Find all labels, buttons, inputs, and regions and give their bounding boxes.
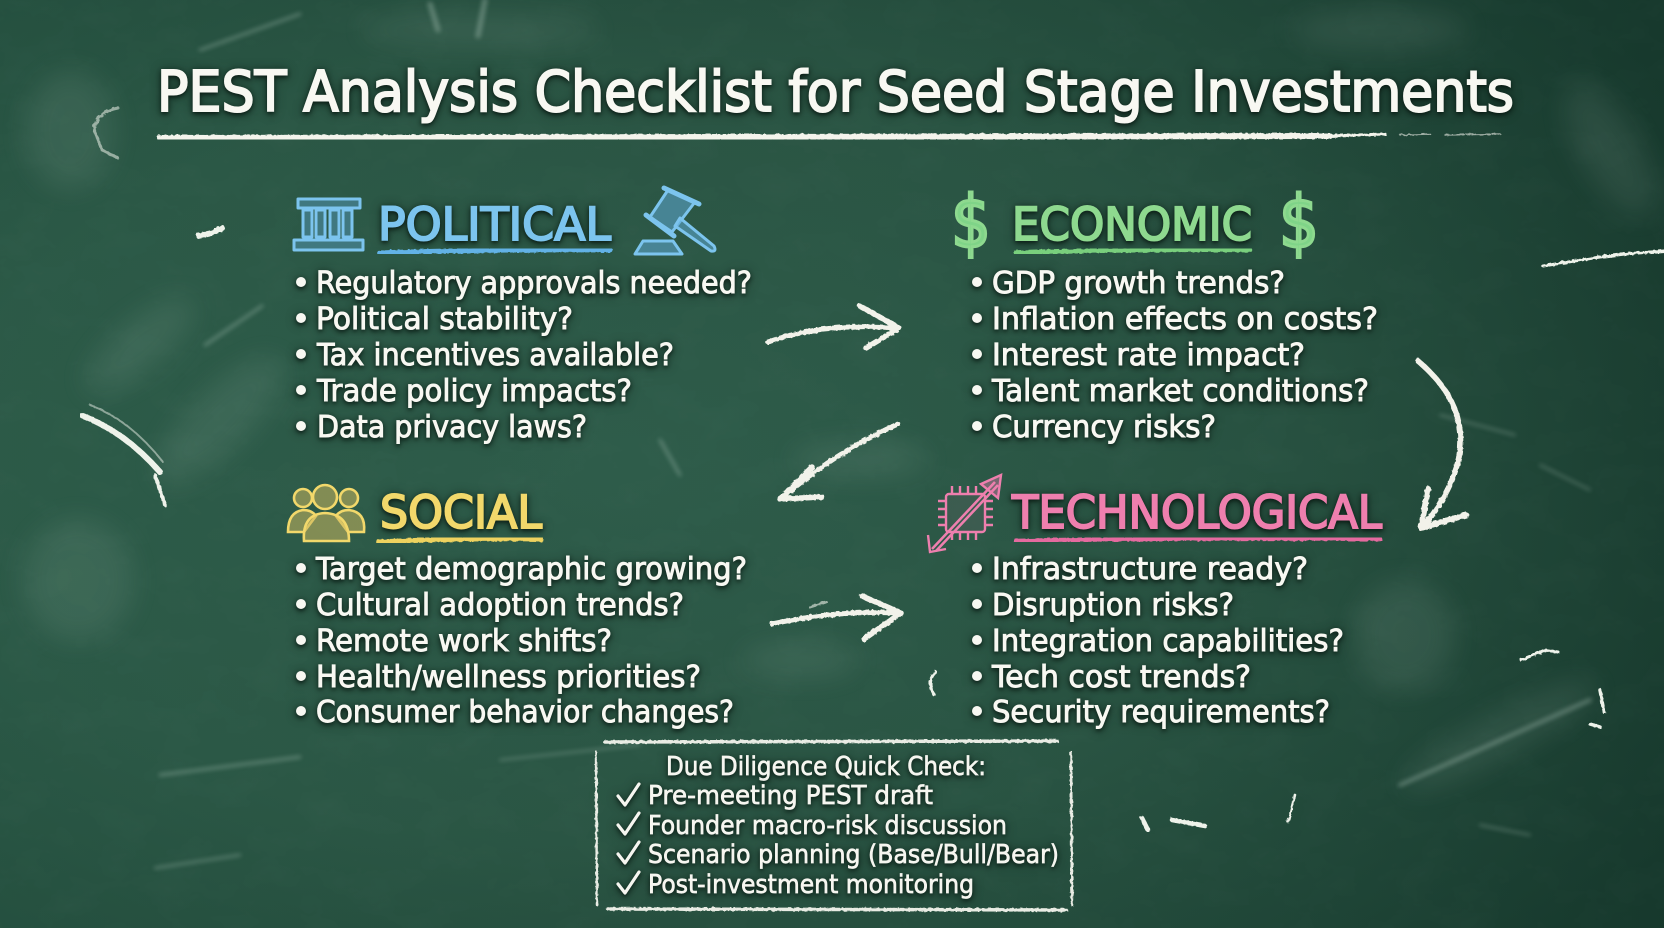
box frame <box>596 741 1072 910</box>
panel: political <box>294 188 752 445</box>
icon: group of people <box>288 485 364 541</box>
technological checklist: Infrastructure ready? <box>992 552 1308 587</box>
political checklist <box>296 266 752 445</box>
political checklist: Regulatory approvals needed? <box>316 266 752 301</box>
arrow: economic to technological <box>1418 361 1466 528</box>
social checklist: Consumer behavior changes? <box>316 695 734 730</box>
heading underline: political <box>380 250 610 253</box>
economic checklist: Currency risks? <box>992 410 1216 445</box>
technological checklist <box>972 552 1344 730</box>
box heading: Due Diligence Quick Check: <box>666 752 986 782</box>
social checklist <box>296 552 747 730</box>
technological checklist: Integration capabilities? <box>992 624 1344 659</box>
economic checklist: GDP growth trends? <box>992 266 1285 301</box>
economic checklist: Talent market conditions? <box>991 374 1369 409</box>
icon: government building <box>294 199 363 250</box>
check items: Post-investment monitoring <box>648 870 974 900</box>
check items: Scenario planning (Base/Bull/Bear) <box>648 840 1059 870</box>
economic checklist: Inflation effects on costs? <box>992 302 1378 337</box>
panel: social <box>288 485 747 730</box>
icon: dollar sign left: $ <box>951 180 991 264</box>
icon: gavel <box>635 188 715 254</box>
economic checklist <box>972 266 1378 445</box>
check items: Founder macro-risk discussion <box>648 811 1007 841</box>
arrow: economic to social <box>780 424 898 499</box>
technological checklist: Disruption risks? <box>992 588 1234 623</box>
heading: political: POLITICAL <box>378 198 611 251</box>
social checklist: Remote work shifts? <box>316 624 612 659</box>
heading underline: technological <box>1015 538 1380 541</box>
technological checklist: Security requirements? <box>992 695 1330 730</box>
social checklist: Target demographic growing? <box>315 552 747 587</box>
political checklist: Data privacy laws? <box>317 410 587 445</box>
panel: economic <box>951 180 1378 445</box>
political checklist: Trade policy impacts? <box>316 374 632 409</box>
heading underline: economic <box>1015 250 1250 253</box>
heading: technological: TECHNOLOGICAL <box>1011 486 1382 539</box>
check items: Pre-meeting PEST draft <box>648 781 933 811</box>
icon: chip with arrow <box>928 475 1001 552</box>
political checklist: Political stability? <box>316 302 573 337</box>
political checklist: Tax incentives available? <box>316 338 674 373</box>
title: PEST Analysis Checklist for Seed Stage Investments <box>157 60 1514 125</box>
economic checklist: Interest rate impact? <box>992 338 1305 373</box>
title underline <box>160 134 1500 138</box>
check items <box>618 781 1059 900</box>
social checklist: Health/wellness priorities? <box>316 660 701 695</box>
social checklist: Cultural adoption trends? <box>316 588 684 623</box>
arrow: political to economic <box>768 306 899 348</box>
heading: social: SOCIAL <box>380 486 542 539</box>
heading: economic: ECONOMIC <box>1012 198 1252 251</box>
panel: technological <box>928 475 1382 730</box>
icon: dollar sign right: $ <box>1279 180 1319 264</box>
arrow: social to technological <box>772 596 901 639</box>
panel: due diligence quick check <box>596 741 1072 910</box>
heading underline: social <box>379 539 541 542</box>
technological checklist: Tech cost trends? <box>991 660 1251 695</box>
